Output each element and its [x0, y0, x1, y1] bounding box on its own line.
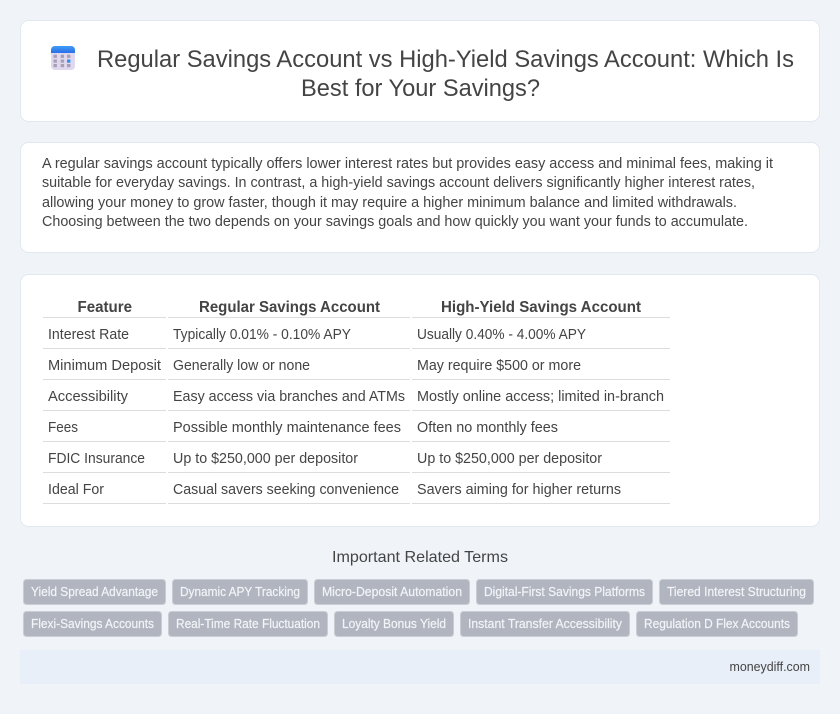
table header row: High-Yield Savings Account	[441, 299, 642, 316]
table row: accessibility: Mostly online access; limited in-branch	[417, 389, 664, 405]
tag: loyalty bonus yield	[334, 612, 454, 636]
tag: digital-first savings platforms: Digital-First Savings Platforms	[484, 585, 645, 599]
heading: related terms: Important Related Terms	[332, 549, 508, 566]
tag: tiered interest structuring: Tiered Interest Structuring	[667, 585, 806, 599]
footer bar	[20, 650, 820, 684]
tag: regulation D flex accounts	[636, 612, 798, 636]
icon: calendar	[51, 46, 75, 70]
table header row: Regular Savings Account	[199, 299, 381, 316]
table row: interest rate: Typically 0.01% - 0.10% APY	[173, 327, 351, 343]
table row: minimum deposit: Minimum Deposit	[48, 358, 161, 374]
table row: accessibility: Accessibility	[48, 389, 129, 405]
tag: tiered interest structuring	[660, 580, 814, 604]
table row: FDIC insurance: Up to $250,000 per depositor	[417, 451, 602, 467]
table row: accessibility	[48, 389, 664, 405]
tag: yield spread advantage	[24, 580, 166, 604]
tag: instant transfer accessibility: Instant Transfer Accessibility	[468, 617, 623, 631]
tag: dynamic APY tracking: Dynamic APY Tracking	[180, 585, 300, 599]
table row: fees: Often no monthly fees	[417, 420, 558, 436]
panel: summary paragraph	[20, 142, 820, 252]
table row: fees: Possible monthly maintenance fees	[173, 420, 401, 436]
tag: flexi-savings accounts: Flexi-Savings Accounts	[31, 617, 154, 631]
tag: micro-deposit automation	[314, 580, 470, 604]
table row: minimum deposit: May require $500 or more	[417, 358, 581, 374]
tag: yield spread advantage: Yield Spread Advantage	[31, 585, 158, 599]
table row: fees: Fees	[48, 420, 78, 436]
text block: summary	[42, 156, 773, 230]
table row: interest rate: Interest Rate	[48, 327, 129, 343]
table row: accessibility: Easy access via branches and ATMs	[173, 389, 405, 405]
tag: instant transfer accessibility	[460, 612, 630, 636]
tag: micro-deposit automation: Micro-Deposit Automation	[322, 585, 462, 599]
text block: summary: A regular savings account typically offers lower interest rates but provides easy access and minimal fees, making it	[42, 156, 773, 172]
text block: summary: Choosing between the two depends on your savings goals and how quickly you want your funds to accumulate.	[42, 214, 748, 230]
tag: regulation D flex accounts: Regulation D Flex Accounts	[644, 617, 790, 631]
tag: loyalty bonus yield: Loyalty Bonus Yield	[342, 617, 446, 631]
table row: ideal for: Ideal For	[48, 482, 104, 498]
table row: FDIC insurance: Up to $250,000 per depositor	[173, 451, 358, 467]
tag: dynamic APY tracking	[172, 580, 308, 604]
related terms tags	[24, 580, 814, 636]
tag: real-time rate fluctuation: Real-Time Rate Fluctuation	[176, 617, 320, 631]
title: Regular Savings Account vs High-Yield Savings Account: Which Is	[97, 46, 794, 73]
tag: digital-first savings platforms	[476, 580, 652, 604]
table row: FDIC insurance: FDIC Insurance	[48, 451, 145, 467]
table header row: Feature	[78, 299, 132, 316]
table row: minimum deposit	[48, 358, 581, 374]
table row: fees	[48, 420, 558, 436]
title: Best for Your Savings?	[301, 75, 540, 102]
table row: minimum deposit: Generally low or none	[173, 358, 310, 374]
text block: summary: suitable for everyday savings. In contrast, a high-yield savings account delivers significantly higher interest rates,	[42, 175, 755, 191]
table row: ideal for: Savers aiming for higher returns	[417, 482, 621, 498]
table row: ideal for	[48, 482, 621, 498]
table row: ideal for: Casual savers seeking convenience	[173, 482, 399, 498]
tag: flexi-savings accounts	[24, 612, 162, 636]
panel: comparison table	[20, 274, 820, 526]
table header row	[78, 299, 642, 316]
tag: real-time rate fluctuation	[168, 612, 328, 636]
footer credit: moneydiff.com	[730, 659, 810, 674]
table row: interest rate: Usually 0.40% - 4.00% APY	[417, 327, 586, 343]
title	[97, 46, 794, 102]
panel: title header	[20, 20, 820, 122]
text block: summary: allowing your money to grow faster, though it may require a higher minimum balance and limited withdrawals.	[42, 195, 737, 211]
table row: interest rate	[48, 327, 586, 343]
table row: FDIC insurance	[48, 451, 602, 467]
